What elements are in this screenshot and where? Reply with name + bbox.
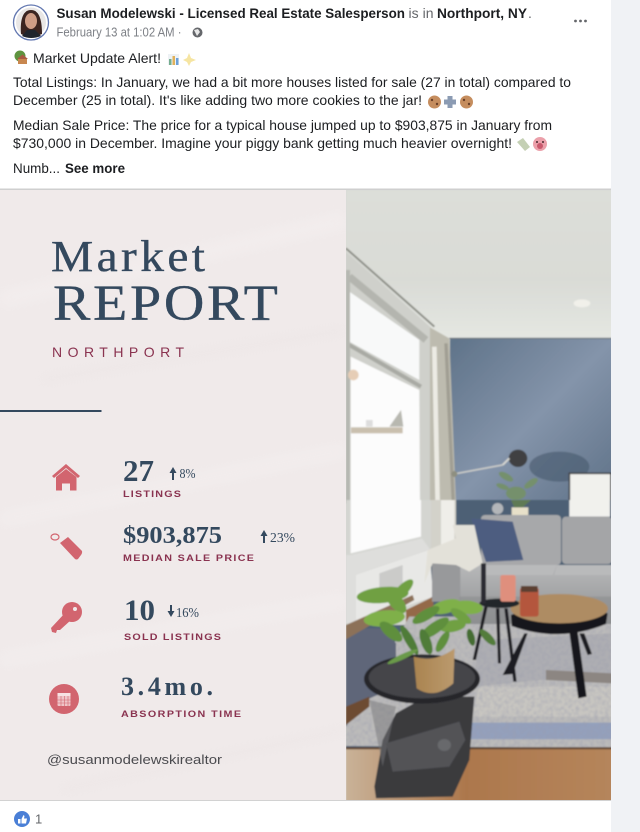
sofa [459, 565, 613, 624]
upper room: ceiling, wall, window [346, 248, 611, 502]
author line: . [528, 5, 532, 21]
median sale price paragraph: Median Sale Price: The price for a typical house jumped up to $903,875 in January from [13, 117, 552, 133]
arrow: up [260, 530, 268, 543]
value: $903,875 [123, 523, 222, 549]
median sale price paragraph [13, 117, 552, 151]
label: ABSORPTION TIME [121, 710, 241, 720]
post text [13, 50, 571, 176]
reactions bar [0, 800, 611, 832]
floor [346, 748, 613, 802]
change: 8% [180, 466, 196, 481]
candle and jar [500, 575, 516, 602]
location label: NORTHPORT [52, 344, 184, 360]
change: 23% [270, 530, 295, 545]
icon: calendar [49, 684, 79, 714]
title: REPORT [53, 274, 278, 331]
window wall and curtain [346, 500, 431, 625]
arrow: down [168, 605, 174, 617]
plant leaves behind pot [356, 576, 498, 666]
basket and blanket [374, 697, 474, 798]
icon: like [14, 811, 30, 827]
stat: median sale price [51, 523, 295, 564]
social handle: @susanmodelewskirealtor [47, 752, 223, 767]
total listings paragraph: December (25 in total). It's like adding two more cookies to the jar! [13, 92, 422, 108]
icon: price tag [51, 534, 82, 560]
left sofa [346, 628, 396, 707]
icon: chart [168, 54, 179, 65]
value: 3.4mo. [121, 672, 213, 701]
see more line: See more [65, 160, 125, 176]
icon: more options [574, 20, 587, 22]
divider above image [0, 188, 611, 190]
icon: sparkles [183, 53, 196, 66]
icon: globe [192, 28, 202, 38]
stat: listings [52, 453, 196, 500]
alert heading: Market Update Alert! [33, 50, 161, 66]
author line: is in [408, 5, 434, 21]
value: 27 [123, 453, 154, 488]
like count: 1 [35, 812, 42, 826]
title [51, 232, 278, 331]
icon: key [51, 602, 82, 633]
icon: house with tree [14, 50, 28, 64]
stat: absorption time [49, 672, 241, 720]
icon: profile avatar [14, 5, 48, 40]
change [170, 466, 196, 481]
author line: Northport, NY [437, 5, 528, 21]
label: MEDIAN SALE PRICE [123, 554, 254, 564]
median sale price paragraph: $730,000 in December. Imagine your piggy bank getting much heavier overnight! [13, 135, 512, 151]
panel: market report [0, 190, 346, 800]
change: 16% [176, 605, 199, 620]
total listings paragraph [13, 74, 571, 108]
rug [346, 617, 613, 748]
post header [14, 5, 587, 40]
change [168, 605, 199, 620]
pot [414, 648, 455, 693]
label: LISTINGS [123, 490, 181, 500]
title: Market [51, 232, 205, 281]
total listings paragraph: Total Listings: In January, we had a bit more houses listed for sale (27 in total) compared to [13, 74, 571, 90]
value: 10 [124, 594, 155, 627]
icons: cookie plus cookie [428, 96, 473, 108]
icon: house [52, 464, 80, 490]
coffee table [503, 633, 528, 675]
icons: money and pig [517, 137, 547, 151]
arrow: up [170, 467, 176, 480]
accent rule [0, 410, 102, 412]
small table [473, 607, 488, 660]
lower room: sofa, tables, plant, rug, floor [346, 500, 613, 803]
photo: living room [346, 190, 613, 803]
timestamp: February 13 at 1:02 AM · [56, 26, 182, 40]
author line: Susan Modelewski - Licensed Real Estate Salesperson [56, 5, 405, 21]
stat: sold listings [51, 594, 221, 643]
see more line: Numb... [13, 160, 60, 176]
side table [364, 654, 480, 704]
label: SOLD LISTINGS [124, 633, 221, 643]
